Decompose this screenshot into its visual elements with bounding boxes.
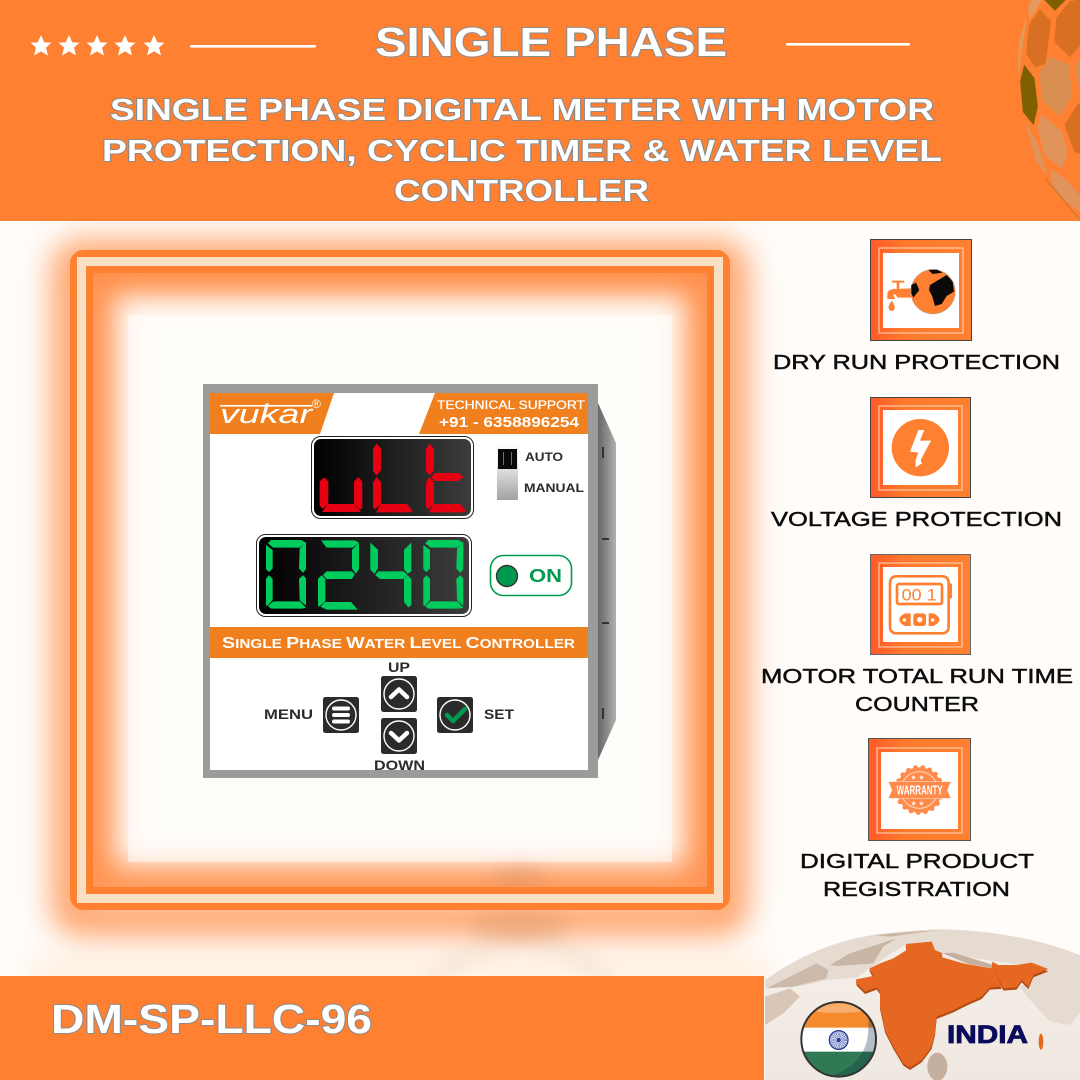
controller name band: SINGLE PHASE W ATER LEVEL CONTROLLER — [222, 635, 575, 652]
red display: uLt — [312, 436, 474, 518]
menu button: MENU — [264, 707, 313, 722]
icon: warranty badge — [868, 738, 970, 840]
icon: tap and globe — [870, 240, 972, 340]
feature: digital product registration — [800, 738, 1034, 901]
label — [761, 666, 1073, 716]
label: DIGITAL PRODUCT — [800, 851, 1034, 873]
subtitle: PROTECTION, CYCLIC TIMER & WATER LEVEL — [102, 133, 942, 168]
brand band — [210, 393, 588, 434]
glowing product frame — [70, 254, 730, 939]
label: COUNTER — [855, 694, 979, 716]
india shadow — [856, 944, 1048, 1070]
honeycomb globe corner — [1018, 0, 1080, 220]
auto manual switch: MANUAL — [524, 481, 584, 495]
on indicator — [490, 556, 572, 596]
down button — [374, 718, 425, 773]
controller name band — [210, 627, 588, 658]
icon: timer — [870, 554, 970, 654]
india shape — [856, 942, 1048, 1068]
feature: dry run protection — [773, 240, 1060, 374]
icon: lightning bolt — [870, 398, 970, 498]
label — [800, 851, 1034, 901]
header band — [0, 0, 1080, 221]
flag badge — [800, 1000, 877, 1078]
icon: warranty badge: ★ ★ — [911, 773, 924, 781]
model number: DM-SP-LLC-96 — [51, 996, 372, 1042]
brand band: vukar — [220, 399, 313, 429]
brand band: TECHNICAL SUPPORT — [437, 398, 586, 412]
label: REGISTRATION — [823, 879, 1010, 901]
subtitle: SINGLE PHASE DIGITAL METER WITH MOTOR — [110, 92, 934, 127]
up button — [381, 660, 417, 712]
on indicator: ON — [529, 566, 562, 586]
device body — [203, 384, 598, 778]
country label: INDIA — [947, 1021, 1028, 1049]
icon: warranty badge: ★ ★ — [911, 800, 924, 808]
up button: UP — [388, 660, 410, 675]
set button: SET — [484, 707, 515, 722]
label: VOLTAGE PROTECTION — [771, 509, 1062, 531]
globe sea — [765, 929, 1080, 1080]
set button — [437, 697, 515, 733]
green display: 0240 — [256, 534, 472, 616]
auto manual switch — [497, 444, 584, 500]
feature: voltage protection — [771, 398, 1062, 531]
brand band: ® — [312, 397, 321, 411]
subtitle — [102, 92, 942, 208]
icon: timer: 00 1 — [902, 585, 937, 604]
label: DRY RUN PROTECTION — [773, 352, 1060, 374]
bottom model band — [0, 976, 764, 1080]
title: SINGLE PHASE — [375, 19, 727, 65]
device side — [598, 403, 616, 760]
icon: warranty badge: WARRANTY — [897, 784, 943, 798]
auto manual switch: AUTO — [525, 450, 563, 464]
down button: DOWN — [374, 758, 425, 773]
feature: motor total run time counter — [761, 554, 1073, 716]
subtitle: CONTROLLER — [394, 173, 649, 208]
label: MOTOR TOTAL RUN TIME — [761, 666, 1073, 688]
map: india on globe — [765, 929, 1080, 1080]
faint peach wash and map shadow — [30, 940, 770, 985]
device: digital meter — [203, 384, 616, 778]
menu button — [264, 697, 359, 733]
land masses — [765, 929, 1080, 1080]
rating stars — [30, 35, 164, 56]
brand band: +91 - 6358896254 — [439, 414, 580, 431]
